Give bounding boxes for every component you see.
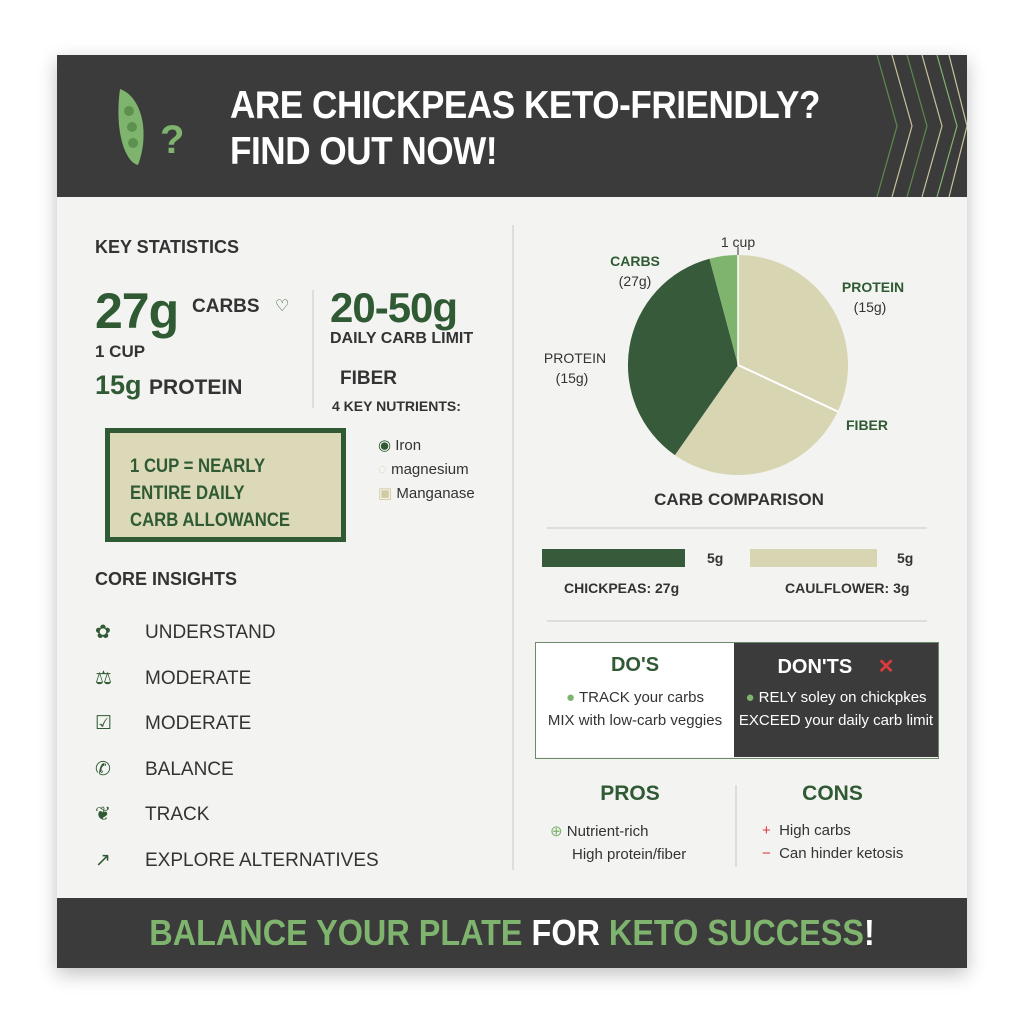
- footer banner: BALANCE YOUR PLATE FOR KETO SUCCESS!: [149, 912, 875, 953]
- stat: daily carb limit: [330, 284, 473, 414]
- nutrients list: ◌ magnesium: [378, 461, 469, 478]
- stat: 27g carbs: 15g PROTEIN: [95, 370, 242, 400]
- don'ts: ● RELY soley on chickpkes: [745, 689, 927, 706]
- bar comparison: CAULFLOWER: 3g: [785, 580, 909, 596]
- pie chart: PROTEIN: [544, 350, 606, 366]
- pros: [550, 782, 686, 863]
- card: [57, 55, 967, 968]
- pie chart: (15g): [854, 299, 886, 315]
- title: ARE CHICKPEAS KETO-FRIENDLY?: [230, 84, 820, 127]
- callout: carb allowance: 1 CUP = NEARLY: [130, 456, 265, 477]
- pie chart: CARB COMPARISON: [654, 490, 824, 509]
- stat: 27g carbs: [95, 283, 289, 400]
- cons: CONS: [802, 782, 863, 805]
- stat: 27g carbs: 1 CUP: [95, 342, 145, 361]
- bar comparison: CHICKPEAS: 27g: [564, 580, 679, 596]
- insights list: EXPLORE ALTERNATIVES: [145, 850, 379, 870]
- don'ts: [734, 643, 938, 757]
- callout: carb allowance: CARB ALLOWANCE: [130, 510, 290, 531]
- don'ts: EXCEED your daily carb limit: [739, 712, 933, 729]
- stat: 27g carbs: ♡: [275, 298, 289, 315]
- insights list: ✆: [95, 758, 111, 780]
- insights list: TRACK: [145, 804, 209, 825]
- pie chart: CARBS: [610, 253, 660, 269]
- stat: daily carb limit: DAILY CARB LIMIT: [330, 330, 473, 347]
- pie chart: PROTEIN: [842, 279, 904, 295]
- header: [57, 55, 967, 197]
- insights list: UNDERSTAND: [145, 622, 276, 643]
- cons: [762, 782, 903, 862]
- pros: High protein/fiber: [572, 846, 686, 863]
- insights list: MODERATE: [145, 668, 251, 688]
- insights list: ⚖: [95, 668, 112, 688]
- bar comparison: 5g: [897, 550, 913, 566]
- callout: carb allowance: ENTIRE DAILY: [130, 483, 245, 504]
- core insights heading: CORE INSIGHTS: [95, 569, 237, 589]
- pie chart: 1 cup: [721, 234, 755, 250]
- pie chart: [544, 234, 904, 509]
- icon: chickpea pod: ?: [160, 118, 184, 162]
- nutrients list: [378, 437, 475, 502]
- pie chart: (15g): [556, 370, 588, 386]
- pros: PROS: [600, 782, 660, 805]
- title: FIND OUT NOW!: [230, 130, 497, 173]
- title: [230, 84, 820, 173]
- pie chart: (27g): [619, 273, 651, 289]
- insights list: ☑: [95, 713, 112, 734]
- pros: ⊕ Nutrient-rich: [550, 823, 648, 840]
- key statistics heading: KEY STATISTICS: [95, 237, 239, 257]
- cons: + High carbs: [762, 822, 851, 839]
- insights list: ↗: [95, 850, 111, 870]
- nutrients list: ▣ Manganase: [378, 485, 475, 502]
- insights list: BALANCE: [145, 758, 234, 780]
- cons: − Can hinder ketosis: [762, 845, 903, 862]
- insights list: ✿: [95, 622, 111, 643]
- don'ts: DON'TS ✕: [777, 656, 895, 678]
- stat: daily carb limit: 4 KEY NUTRIENTS:: [332, 398, 461, 414]
- insights list: MODERATE: [145, 713, 251, 734]
- do's: [536, 643, 734, 757]
- insights list: [95, 622, 379, 870]
- callout: carb allowance: [105, 428, 346, 542]
- do's: DO'S: [611, 654, 659, 676]
- nutrients list: ◉ Iron: [378, 437, 421, 454]
- stat: daily carb limit: 20-50g: [330, 284, 457, 331]
- stat: 27g carbs: 27g: [95, 283, 178, 339]
- decorative chevrons: [876, 55, 967, 197]
- stat: daily carb limit: FIBER: [340, 368, 397, 389]
- do's and don'ts: [535, 642, 939, 759]
- icon: chickpea pod: [118, 89, 184, 165]
- stat: 27g carbs: CARBS: [192, 296, 260, 317]
- pie chart: FIBER: [846, 417, 888, 433]
- insights list: ❦: [95, 804, 111, 825]
- do's: MIX with low-carb veggies: [548, 712, 722, 729]
- bar comparison: [542, 549, 913, 596]
- footer banner: [57, 898, 967, 968]
- do's: ● TRACK your carbs: [566, 689, 704, 706]
- bar comparison: 5g: [707, 550, 723, 566]
